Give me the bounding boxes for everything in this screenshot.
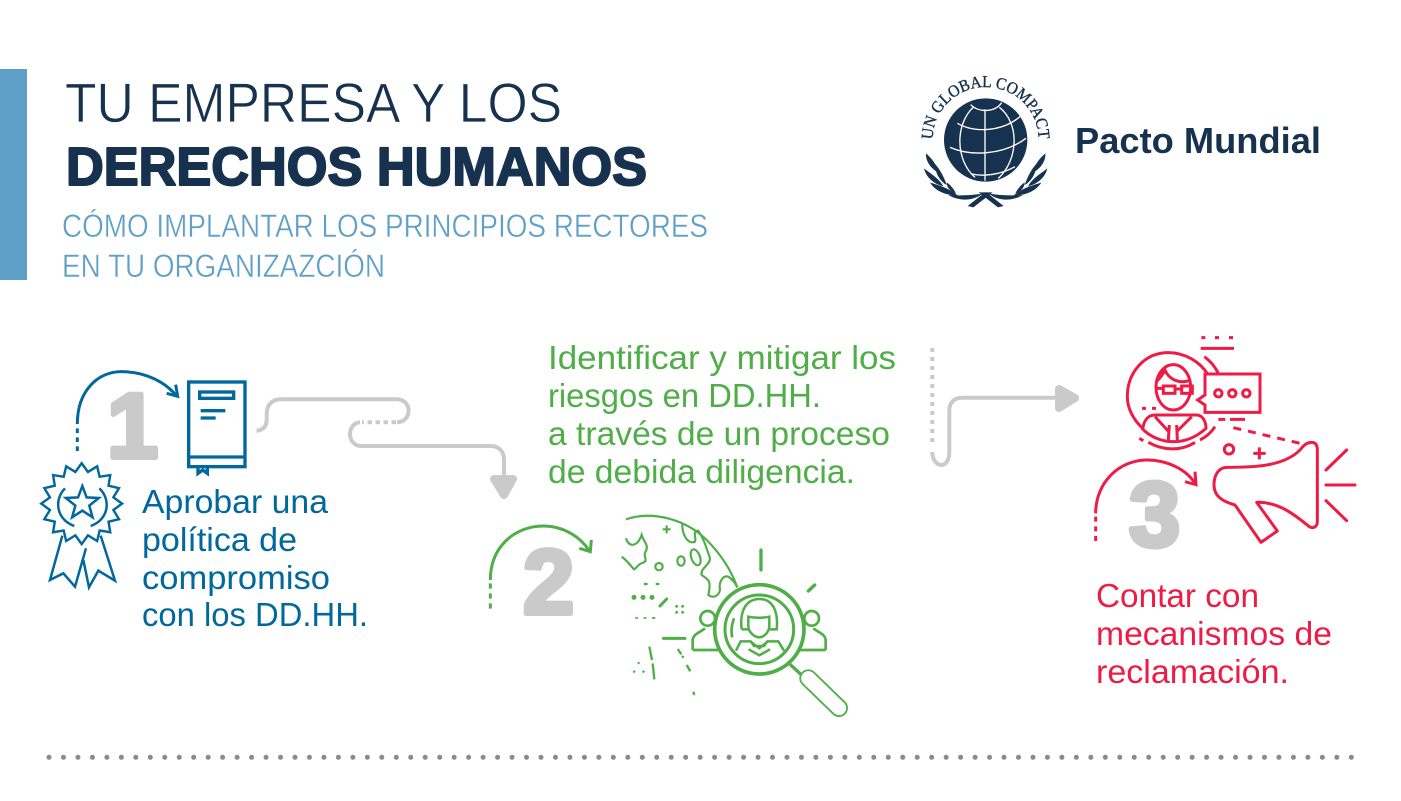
step 2 number: 2 bbox=[523, 532, 574, 634]
step 2 curved arrow bbox=[490, 526, 591, 609]
person in lens bbox=[736, 599, 784, 655]
subtitle: CÓMO IMPLANTAR LOS PRINCIPIOS RECTORES bbox=[62, 208, 708, 244]
step 3 text bbox=[1096, 577, 1332, 690]
scattered marks bbox=[633, 584, 694, 695]
step 1 text: política de bbox=[142, 521, 297, 558]
step 3 text: reclamación. bbox=[1096, 653, 1289, 690]
icon: speech bubble bbox=[1198, 374, 1260, 412]
step 2 text: Identificar y mitigar los bbox=[548, 339, 896, 376]
icon: megaphone bbox=[1214, 442, 1355, 542]
step 1 text: con los DD.HH. bbox=[142, 596, 368, 633]
step 3 number: 3 bbox=[1129, 464, 1180, 566]
step 3 curved arrow bbox=[1096, 460, 1196, 543]
connector arrow: step 1 to step 2 bbox=[256, 399, 513, 495]
logo wordmark: Pacto Mundial bbox=[1075, 120, 1321, 161]
logo: UN Global Compact bbox=[921, 76, 1050, 208]
logo ring text: UN GLOBAL COMPACT bbox=[921, 76, 1050, 138]
logo right laurel bbox=[979, 153, 1047, 207]
logo globe bbox=[944, 98, 1027, 182]
step 3 text: Contar con bbox=[1096, 577, 1259, 614]
title: DERECHOS HUMANOS bbox=[66, 137, 647, 197]
icon: globe with continents bbox=[622, 516, 737, 597]
title: TU EMPRESA Y LOS bbox=[65, 71, 562, 134]
step 1 text: compromiso bbox=[142, 559, 330, 596]
side people bbox=[693, 611, 826, 650]
connector arrow: step 2 to step 3 bbox=[932, 348, 1075, 465]
title bbox=[65, 71, 647, 197]
step 3 icons bbox=[1096, 338, 1355, 543]
step 1 text: Aprobar una bbox=[142, 483, 329, 520]
icon: magnifier handle bbox=[790, 664, 839, 708]
step 1 icons bbox=[41, 372, 245, 587]
accent bar bbox=[0, 69, 27, 280]
icon: person with glasses bbox=[1127, 353, 1218, 449]
step 2 text: de debida diligencia. bbox=[548, 453, 855, 490]
step 1 number: 1 bbox=[107, 376, 158, 478]
subtitle bbox=[62, 208, 708, 284]
step 3 text: mecanismos de bbox=[1096, 615, 1332, 652]
logo left laurel bbox=[924, 153, 993, 207]
step 2 text: a través de un proceso bbox=[548, 415, 890, 452]
icon: book bbox=[189, 382, 245, 473]
step 1 text bbox=[142, 483, 368, 633]
step 2 text: riesgos en DD.HH. bbox=[548, 377, 821, 414]
step 1 curved arrow bbox=[77, 372, 178, 455]
step 2 text bbox=[548, 339, 896, 490]
icon: award rosette bbox=[41, 463, 122, 587]
icon: magnifier lens bbox=[715, 550, 815, 674]
subtitle: EN TU ORGANIZAZCIÓN bbox=[62, 248, 385, 284]
small marks bbox=[1201, 338, 1300, 459]
step 2 icons bbox=[490, 516, 839, 708]
